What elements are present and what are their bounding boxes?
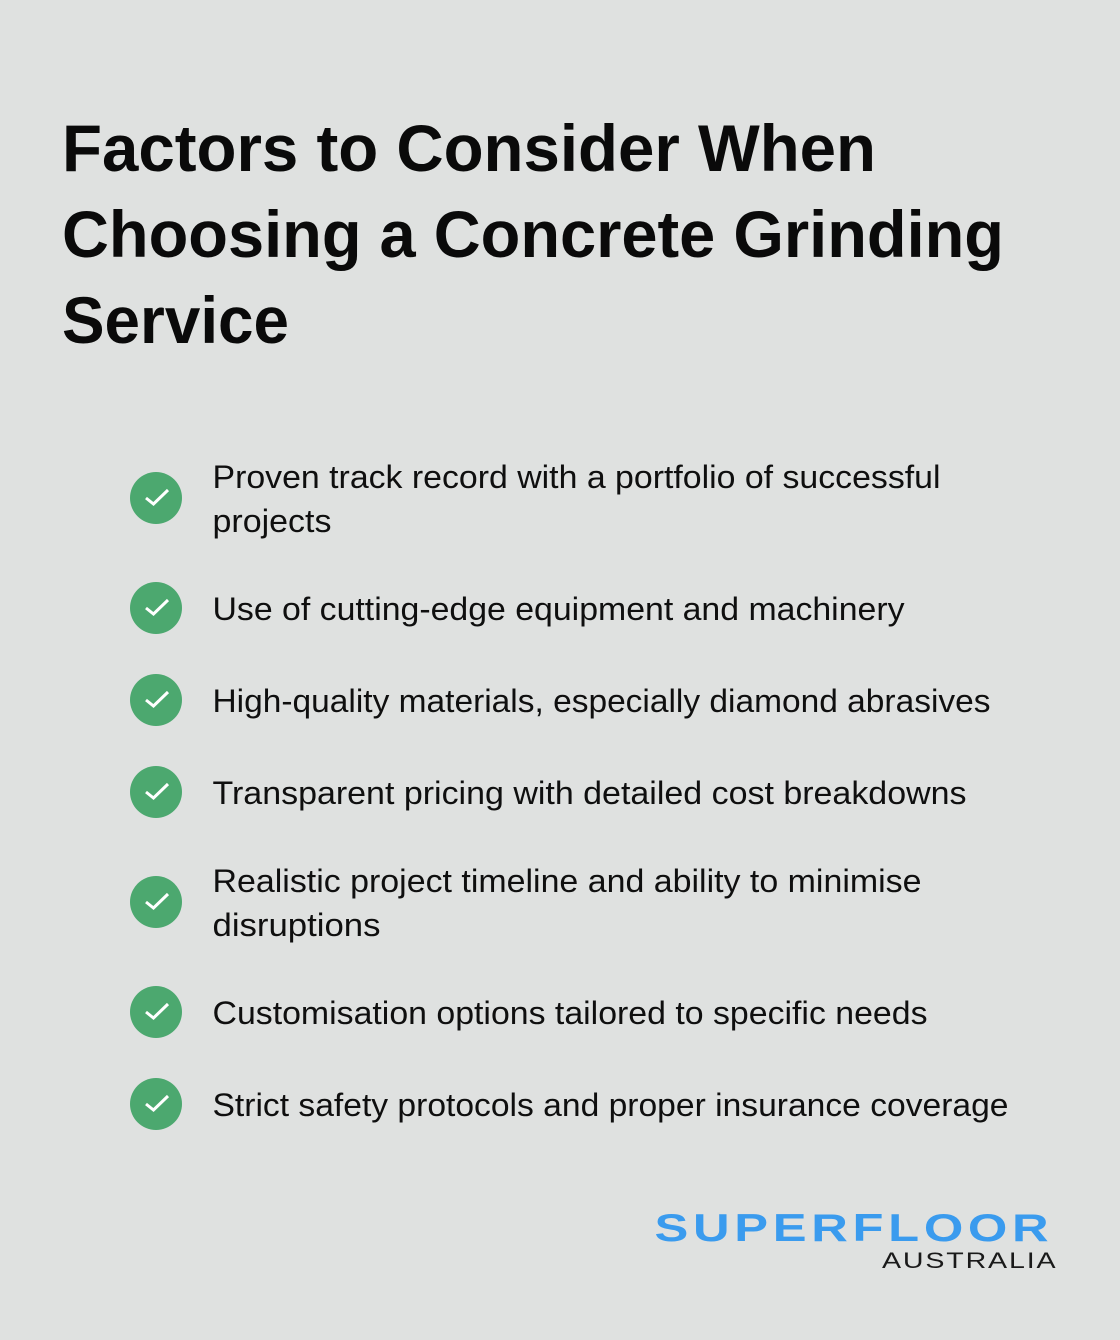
title: Service (62, 283, 289, 357)
item 6 (130, 986, 928, 1038)
title: Choosing a Concrete Grinding (62, 197, 1004, 271)
item 3 (130, 674, 991, 726)
item 2: Use of cutting-edge equipment and machinery (212, 591, 905, 627)
checklist (130, 459, 1009, 1130)
item 2 (130, 582, 905, 634)
item 4: Transparent pricing with detailed cost breakdowns (212, 775, 966, 811)
item 1: projects (212, 503, 332, 539)
item 7: Strict safety protocols and proper insurance coverage (212, 1087, 1009, 1123)
item 5: Realistic project timeline and ability to minimise (212, 863, 921, 899)
item 7 (130, 1078, 1009, 1130)
item 1: Proven track record with a portfolio of successful (212, 459, 940, 495)
logo (654, 1206, 1056, 1273)
item 5 (130, 863, 921, 943)
logo: SUPERFLOOR (654, 1206, 1053, 1250)
item 5: disruptions (212, 907, 380, 943)
item 3: High-quality materials, especially diamond abrasives (212, 683, 991, 719)
item 4 (130, 766, 966, 818)
logo: AUSTRALIA (882, 1249, 1056, 1273)
title: Factors to Consider When (62, 111, 876, 185)
item 6: Customisation options tailored to specific needs (212, 995, 928, 1031)
title (62, 111, 1004, 357)
item 1 (130, 459, 940, 539)
